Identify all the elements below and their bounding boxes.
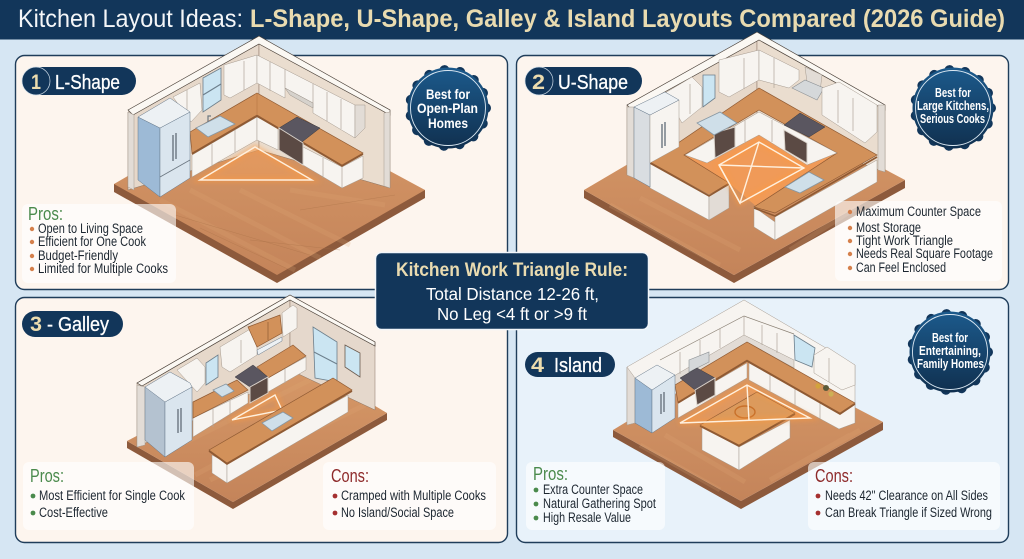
Galley pros list: [23, 462, 194, 530]
callout: kitchen work triangle rule: Kitchen Work Triangle Rule:: [396, 260, 628, 281]
badge: best for entertaining, family homes: Best for: [932, 331, 968, 345]
badge: best for open-plan homes: Best for: [426, 87, 471, 102]
Island pros list: [526, 462, 665, 530]
title banner: Kitchen Layout Ideas:: [18, 5, 243, 33]
Galley cons list: Cons:: [331, 466, 369, 486]
callout: kitchen work triangle rule: Total Distance 12-26 ft,: [426, 284, 599, 304]
U-Shape list: Needs Real Square Footage: [856, 246, 993, 261]
panel: Galley: [16, 298, 508, 542]
Island cons list: Needs 42" Clearance on All Sides: [825, 488, 988, 503]
badge: best for large kitchens, serious cooks: Best for: [935, 86, 971, 100]
section label: Galley: [22, 311, 123, 337]
L-Shape pros list: Pros:: [28, 204, 63, 224]
badge: best for entertaining, family homes: [910, 312, 990, 392]
Galley pros list: Pros:: [30, 466, 64, 486]
section label: Island: 4: [531, 354, 544, 377]
L-Shape pros list: Budget-Friendly: [38, 248, 118, 263]
callout: kitchen work triangle rule: No Leg <4 ft or >9 ft: [437, 304, 587, 324]
Galley cons list: No Island/Social Space: [341, 505, 454, 520]
panel: Island: [516, 298, 1008, 542]
panel: L-Shape: [16, 56, 508, 290]
U-Shape list: Maximum Counter Space: [856, 204, 981, 219]
section label: Galley: 3: [30, 313, 42, 336]
title banner: [0, 0, 1024, 40]
Island pros list: Extra Counter Space: [543, 482, 643, 497]
kitchen illustration: L-Shape: [114, 36, 425, 283]
kitchen illustration: Island: [613, 300, 883, 509]
section label: Island: [525, 352, 615, 377]
Galley pros list: Most Efficient for Single Cook: [39, 488, 185, 503]
Galley cons list: Cramped with Multiple Cooks: [341, 488, 486, 503]
callout: kitchen work triangle rule: [376, 252, 648, 330]
Island pros list: Pros:: [533, 464, 568, 484]
badge: best for open-plan homes: [408, 68, 488, 148]
section label: U-Shape: U-Shape: [558, 72, 628, 94]
panel: U-Shape: [516, 56, 1008, 290]
badge: best for large kitchens, serious cooks: Serious Cooks: [920, 112, 985, 126]
section label: L-Shape: [22, 67, 136, 95]
Island cons list: [808, 462, 1000, 530]
U-Shape list: Can Feel Enclosed: [856, 260, 946, 275]
L-Shape pros list: Open to Living Space: [38, 221, 143, 236]
L-Shape pros list: Limited for Multiple Cooks: [38, 261, 168, 276]
badge: best for open-plan homes: Open-Plan: [417, 101, 478, 116]
title banner: L-Shape, U-Shape, Galley & Island Layouts Compared (2026 Guide): [250, 5, 1005, 33]
Galley cons list: [323, 462, 496, 530]
badge: best for large kitchens, serious cooks: [912, 68, 994, 148]
Island cons list: Cons:: [815, 466, 853, 486]
section label: Island: Island: [554, 355, 602, 377]
L-Shape pros list: [22, 204, 176, 283]
badge: best for entertaining, family homes: Entertaining,: [919, 344, 981, 358]
U-Shape list: [835, 201, 1002, 281]
section label: L-Shape: 1: [31, 71, 41, 94]
kitchen illustration: Galley: [127, 295, 387, 509]
L-Shape pros list: Efficient for One Cook: [38, 234, 146, 249]
Island pros list: High Resale Value: [543, 510, 631, 525]
badge: best for entertaining, family homes: Family Homes: [917, 357, 984, 371]
section label: Galley: - Galley: [47, 314, 109, 336]
Island pros list: Natural Gathering Spot: [543, 496, 656, 511]
Galley pros list: Cost-Effective: [39, 505, 108, 520]
badge: best for large kitchens, serious cooks: Large Kitchens,: [917, 99, 989, 113]
section label: U-Shape: 2: [532, 71, 545, 94]
badge: best for open-plan homes: Homes: [428, 116, 468, 131]
section label: L-Shape: L-Shape: [55, 72, 120, 94]
section label: U-Shape: [525, 67, 642, 95]
kitchen illustration: U-Shape: [584, 32, 905, 283]
U-Shape list: Most Storage: [856, 220, 921, 235]
U-Shape list: Tight Work Triangle: [856, 233, 953, 248]
